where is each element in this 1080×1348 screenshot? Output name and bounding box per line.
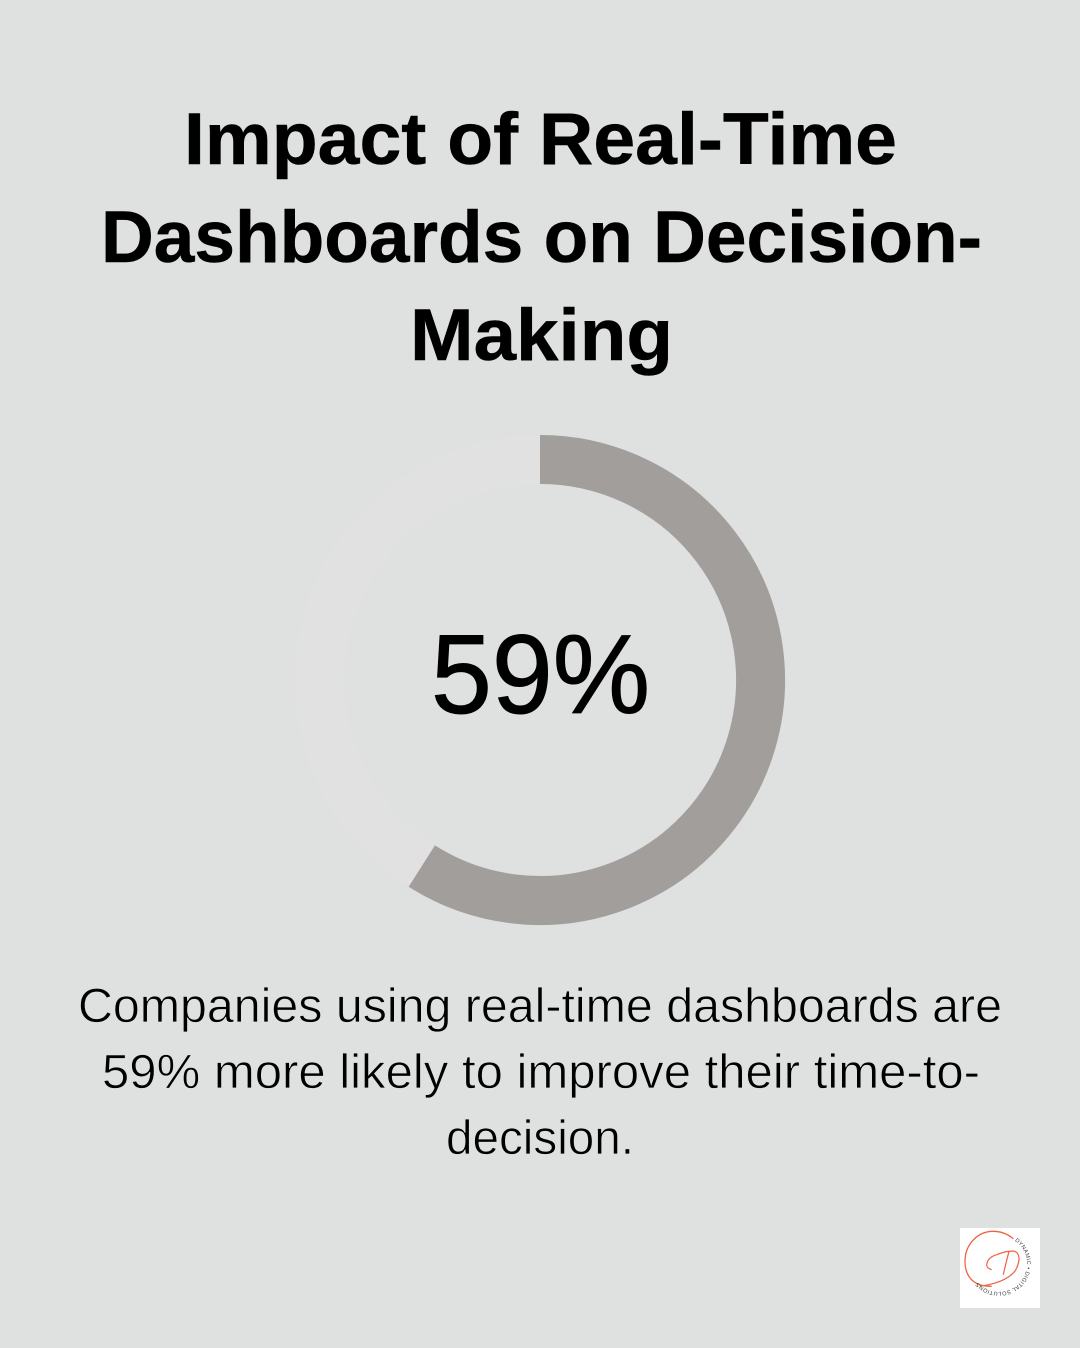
description text: 59% more likely to improve their time-to- xyxy=(102,1046,980,1099)
description text: Companies using real-time dashboards are xyxy=(78,980,1002,1033)
description text xyxy=(78,980,1002,1165)
logo circle stroke xyxy=(965,1231,1013,1286)
logo script letter xyxy=(980,1251,1019,1286)
title: Dashboards on Decision- xyxy=(101,197,982,278)
title: Making xyxy=(410,295,673,376)
donut value arc xyxy=(422,460,761,900)
donut track xyxy=(320,460,760,900)
donut chart: 59% xyxy=(320,460,761,900)
logo ring text: DYNAMIC • DIGITAL SOLUTIONS xyxy=(976,1238,1031,1296)
description text: decision. xyxy=(446,1112,634,1165)
title xyxy=(101,99,982,376)
center percentage: 59% xyxy=(431,612,650,737)
title: Impact of Real-Time xyxy=(184,99,897,180)
logo badge xyxy=(960,1228,1040,1308)
